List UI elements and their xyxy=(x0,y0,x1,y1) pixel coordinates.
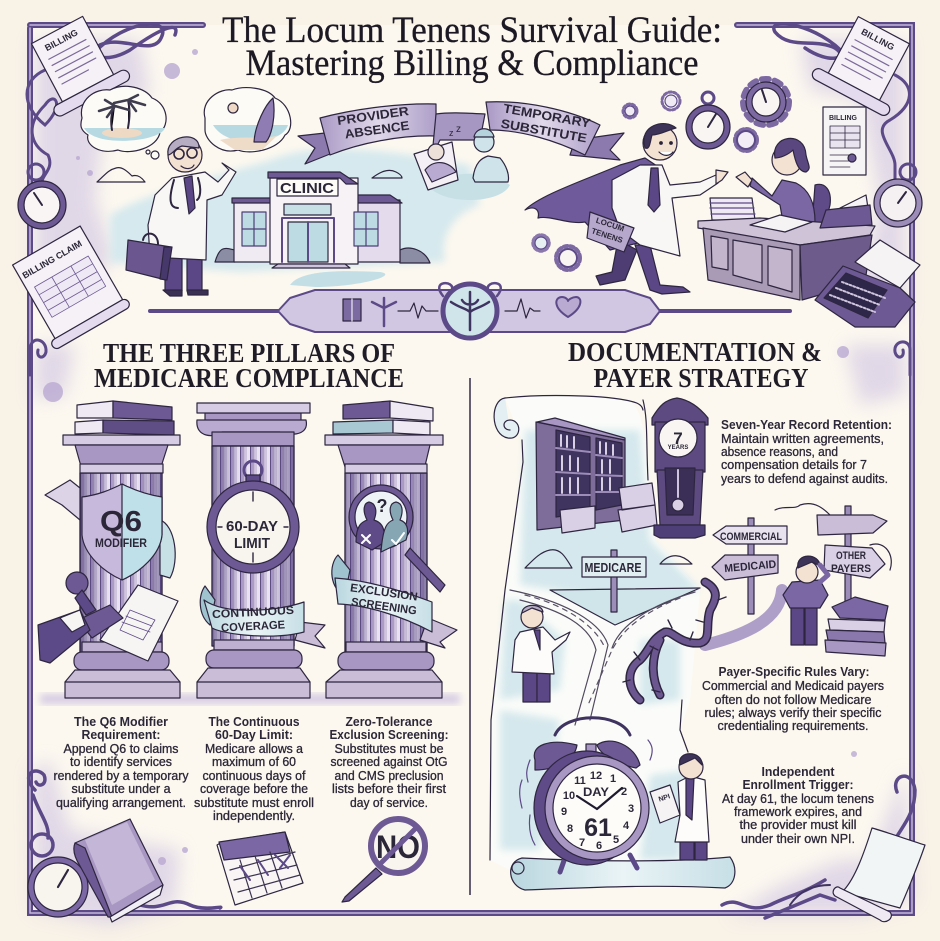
text: independent enrollment trigger: Enrollment Trigger: xyxy=(742,778,854,792)
stopwatch left xyxy=(18,164,66,229)
pillar 2: 60-day limit: COVERAGE xyxy=(221,619,286,635)
rolled scroll and stethoscope bottom right xyxy=(722,828,925,922)
road and medicare sign: MEDICARE xyxy=(584,561,642,575)
alarm clock day 61: DAY xyxy=(583,785,609,799)
text: continuous 60-day limit: substitute must enroll xyxy=(194,796,314,810)
alarm clock day 61: 1 xyxy=(610,773,616,785)
text: zero-tolerance exclusion screening xyxy=(330,715,448,810)
text: independent enrollment trigger: At day 61, the locum tenens xyxy=(722,792,874,806)
magnifier with NO symbol: NO xyxy=(376,829,420,865)
doctor holding NPI form xyxy=(650,754,709,860)
title: Mastering Billing & Compliance xyxy=(246,43,698,84)
text: zero-tolerance exclusion screening: day of service. xyxy=(350,796,428,810)
alarm clock day 61: 12 xyxy=(590,770,602,782)
alarm clock day 61: 7 xyxy=(579,837,585,849)
alarm clock day 61: 10 xyxy=(563,790,575,802)
pillar 1: Q6 modifier xyxy=(38,401,180,698)
heading: three pillars: THE THREE PILLARS OF xyxy=(103,338,395,368)
text: seven-year record retention: absence reasons, and xyxy=(721,445,838,459)
confused man xyxy=(783,556,828,645)
pillar 3: exclusion screening: SCREENING xyxy=(350,596,417,618)
small doctor on medicare path xyxy=(512,605,570,702)
divider xyxy=(469,378,471,895)
pillar floor shadow xyxy=(40,694,460,704)
scroll backdrop with path xyxy=(490,396,700,870)
text: Q6 modifier requirement xyxy=(54,715,189,810)
calendar xyxy=(217,832,303,905)
clouds xyxy=(525,504,891,570)
billing scroll top left: BILLING xyxy=(43,27,80,53)
road and medicare sign xyxy=(510,550,700,725)
text: Q6 modifier requirement: Append Q6 to claims xyxy=(64,742,178,756)
ribbon: temporary substitute: SUBSTITUTE xyxy=(500,117,588,145)
text: continuous 60-day limit: The Continuous xyxy=(208,715,300,729)
text: continuous 60-day limit: continuous days of xyxy=(202,769,306,783)
pillar 2: 60-day limit: CONTINUOUS xyxy=(212,605,295,621)
heading: three pillars xyxy=(94,338,404,393)
substitute doctor with cape: TENENS xyxy=(590,226,625,245)
text: seven-year record retention xyxy=(721,418,892,486)
text: payer-specific rules xyxy=(702,665,884,733)
heading: documentation: PAYER STRATEGY xyxy=(594,363,808,393)
alarm clock day 61: 2 xyxy=(621,786,627,798)
thorny vine xyxy=(623,582,782,700)
text: seven-year record retention: years to defend against audits. xyxy=(721,472,888,486)
book xyxy=(74,819,163,922)
text: zero-tolerance exclusion screening: Zero-Tolerance xyxy=(346,715,433,729)
doctor holding NPI form: NPI xyxy=(658,793,671,804)
text: payer-specific rules: rules; always verify their specific xyxy=(704,706,882,720)
heading: documentation: DOCUMENTATION & xyxy=(568,337,822,367)
text: payer-specific rules: Commercial and Medicaid payers xyxy=(702,679,884,693)
billing scroll top right xyxy=(810,10,922,118)
signposts: PAYERS xyxy=(831,563,871,575)
text: payer-specific rules: credentialing requirements. xyxy=(718,719,868,733)
clinic building xyxy=(215,172,430,287)
grandfather clock with 7 years xyxy=(652,398,708,538)
ribbon: provider absence: ABSENCE xyxy=(344,119,410,141)
alarm clock day 61 xyxy=(520,718,652,872)
patient in bed and surgeon xyxy=(414,124,510,200)
text: Q6 modifier requirement: qualifying arrangement. xyxy=(56,796,186,810)
pillar 1: Q6 modifier: Q6 xyxy=(100,506,142,538)
billing claim form xyxy=(7,224,131,350)
ribbon: provider absence xyxy=(298,104,436,164)
text: continuous 60-day limit: maximum of 60 xyxy=(212,755,296,769)
alarm clock day 61: 9 xyxy=(561,806,567,818)
stopwatch right xyxy=(874,164,922,227)
ribbon: temporary substitute: TEMPORARY xyxy=(502,101,592,131)
desk with papers xyxy=(698,195,875,300)
text: independent enrollment trigger: under their own NPI. xyxy=(741,832,855,846)
cloud xyxy=(97,168,402,182)
text: seven-year record retention: Maintain written agreements, xyxy=(721,432,884,446)
text: zero-tolerance exclusion screening: and CMS preclusion xyxy=(334,769,444,783)
grandfather clock with 7 years: YEARS xyxy=(668,445,688,451)
clinic building: CLINIC xyxy=(280,180,334,197)
ribbon: temporary substitute xyxy=(432,101,624,160)
signposts: MEDICAID xyxy=(724,559,777,575)
text: independent enrollment trigger: the provider must kill xyxy=(740,818,856,832)
thought bubble: island xyxy=(81,86,166,159)
text: zero-tolerance exclusion screening: screened against OtG xyxy=(330,755,448,769)
text: continuous 60-day limit: coverage before the xyxy=(200,782,308,796)
billing notice on wall: BILLING xyxy=(829,115,858,122)
billing notice on wall xyxy=(823,107,866,175)
substitute doctor with cape: LOCUM xyxy=(595,216,626,234)
patient in bed and surgeon: z xyxy=(456,124,461,135)
alarm clock day 61: 5 xyxy=(613,834,619,846)
text: continuous 60-day limit: Medicare allows a xyxy=(205,742,303,756)
text: continuous 60-day limit: 60-Day Limit: xyxy=(215,728,293,742)
text: Q6 modifier requirement: The Q6 Modifier xyxy=(74,715,168,729)
text: continuous 60-day limit: independently. xyxy=(213,809,295,823)
ribbon: provider absence: PROVIDER xyxy=(336,104,410,128)
blue wash behind the clinic xyxy=(110,149,480,272)
receptionist xyxy=(736,138,830,225)
signposts xyxy=(712,506,887,614)
billing scroll top left xyxy=(21,10,132,118)
patient in bed and surgeon: z xyxy=(449,128,454,138)
alarm clock day 61: 11 xyxy=(574,775,586,787)
text: independent enrollment trigger: framework expires, and xyxy=(734,805,862,819)
alarm clock day 61: 3 xyxy=(628,803,634,815)
title: The Locum Tenens Survival Guide: xyxy=(222,10,722,51)
signposts: COMMERCIAL xyxy=(720,531,782,543)
text: Q6 modifier requirement: rendered by a temporary xyxy=(54,769,189,783)
signposts: OTHER xyxy=(836,550,866,562)
text: independent enrollment trigger: Independent xyxy=(762,765,835,779)
typewriter xyxy=(815,240,920,327)
substitute doctor with cape xyxy=(525,124,728,294)
title xyxy=(222,10,722,84)
alarm clock day 61: 8 xyxy=(567,823,573,835)
text: zero-tolerance exclusion screening: Substitutes must be xyxy=(334,742,444,756)
text: payer-specific rules: Payer-Specific Rules Vary: xyxy=(718,665,870,679)
text: independent enrollment trigger xyxy=(722,765,874,846)
alarm clock day 61: 6 xyxy=(596,840,602,852)
text: Q6 modifier requirement: to identify services xyxy=(70,755,172,769)
text: payer-specific rules: often do not follow Medicare xyxy=(714,693,872,707)
pillar 2: 60-day limit xyxy=(197,403,325,698)
billing claim form: BILLING CLAIM xyxy=(21,238,84,281)
text: seven-year record retention: Seven-Year Record Retention: xyxy=(721,418,892,432)
text: seven-year record retention: compensation details for 7 xyxy=(721,458,867,472)
heading: three pillars: MEDICARE COMPLIANCE xyxy=(94,363,404,393)
pillar 2: 60-day limit: LIMIT xyxy=(234,536,270,552)
scroll roller base xyxy=(511,857,735,890)
text: continuous 60-day limit xyxy=(194,715,314,823)
pillar 3: exclusion screening: EXCLUSION xyxy=(349,582,418,604)
stack of books xyxy=(825,597,888,656)
text: zero-tolerance exclusion screening: lists before their first xyxy=(332,782,447,796)
pillar 3: exclusion screening xyxy=(325,401,457,698)
text: Q6 modifier requirement: substitute under a xyxy=(72,782,171,796)
thought bubble: surfboard xyxy=(204,88,291,152)
pillar 2: 60-day limit: 60-DAY xyxy=(226,519,278,535)
pillar 1: Q6 modifier: MODIFIER xyxy=(95,538,148,550)
text: zero-tolerance exclusion screening: Exclusion Screening: xyxy=(330,728,448,742)
magnifier with NO symbol xyxy=(342,819,425,902)
bookshelf xyxy=(536,418,657,533)
ornamental medical banner xyxy=(278,283,660,338)
stopwatch bottom left xyxy=(28,834,88,917)
billing scroll top right: BILLING xyxy=(860,27,896,52)
alarm clock day 61: 61 xyxy=(584,814,612,842)
doctor with briefcase xyxy=(126,137,236,296)
pillar 3: exclusion screening: ? xyxy=(376,496,388,516)
grandfather clock with 7 years: 7 xyxy=(673,429,683,448)
text: Q6 modifier requirement: Requirement: xyxy=(82,728,160,742)
heading: documentation xyxy=(568,337,822,393)
alarm clock day 61: 4 xyxy=(623,820,630,832)
gears and stopwatches xyxy=(533,79,789,270)
